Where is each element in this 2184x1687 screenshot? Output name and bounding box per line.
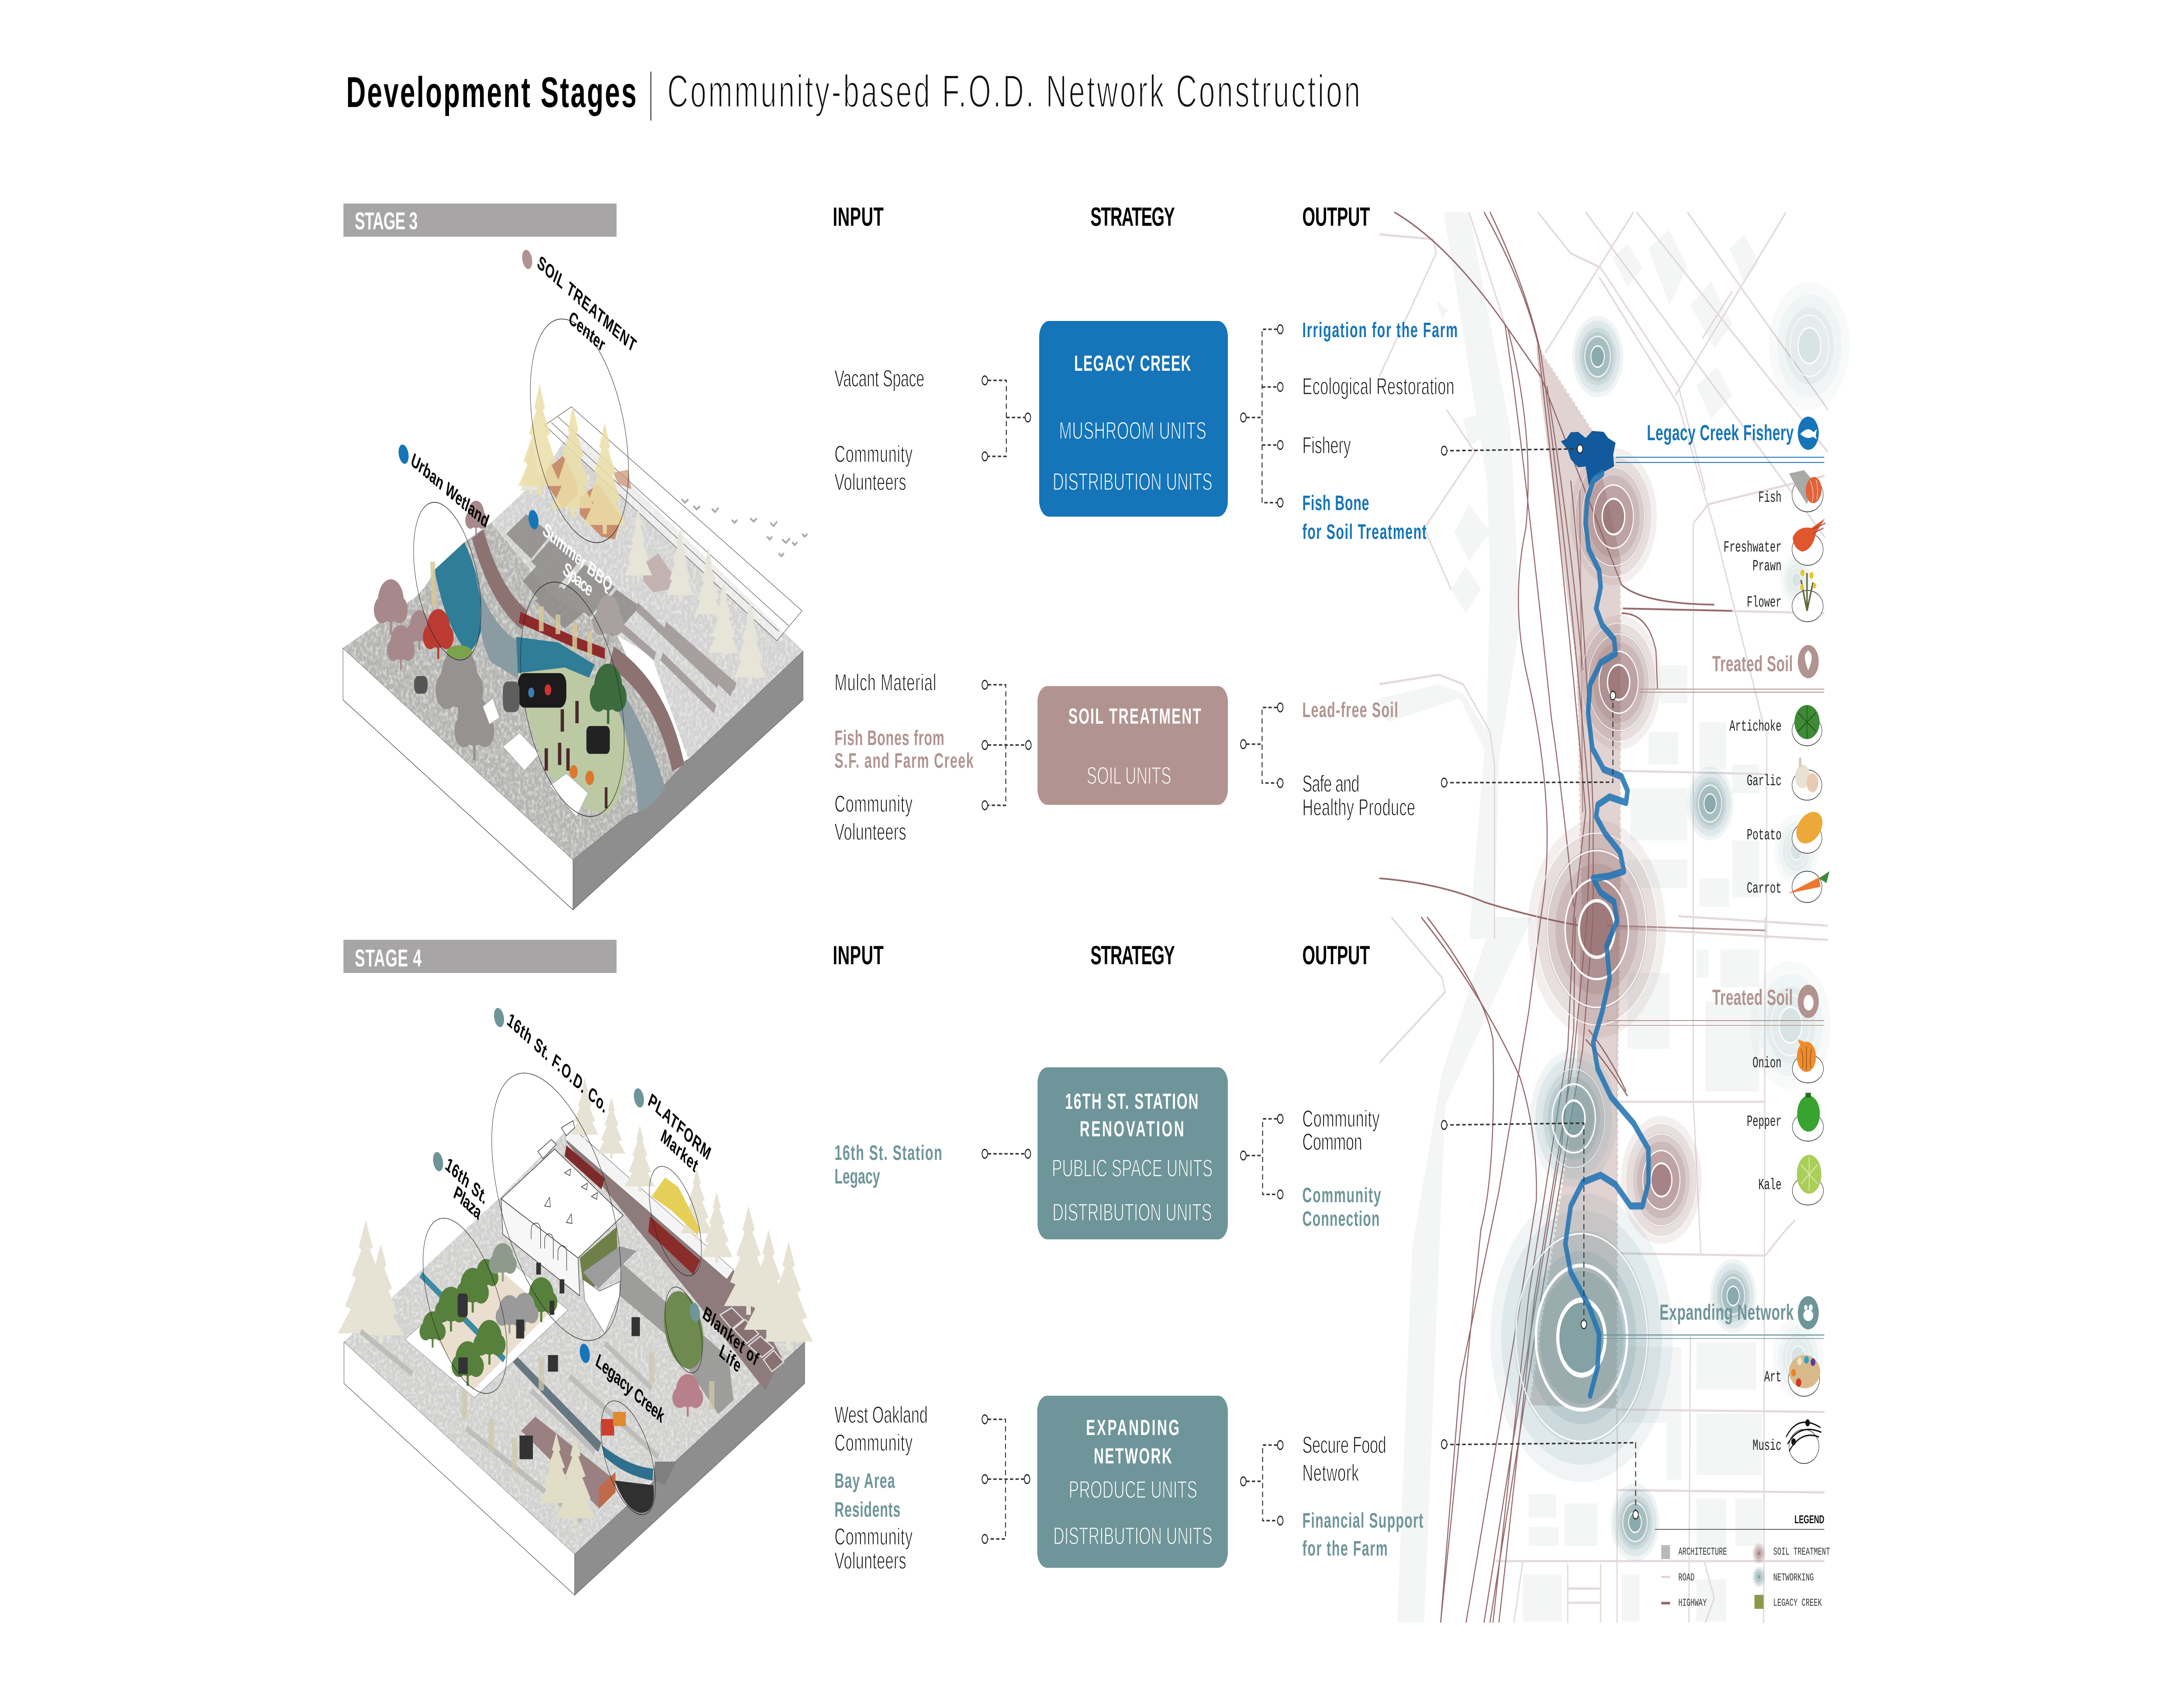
soil beds <box>506 514 640 637</box>
hedge <box>447 645 472 659</box>
stage 3 banner <box>343 204 617 237</box>
output connector <box>1241 1441 1283 1525</box>
input: station legacy: 16th St. Station <box>834 1141 942 1165</box>
soil treatment containers <box>546 456 632 539</box>
icon: pepper <box>1797 1093 1820 1132</box>
outputs: legacy creek <box>1303 318 1458 544</box>
category: treated soil 1: Treated Soil <box>1712 652 1793 676</box>
column headings stage 4: STRATEGY <box>1091 941 1175 970</box>
inputs: legacy creek: Community <box>834 441 912 467</box>
food labels: Kale <box>1759 1176 1782 1194</box>
stage 4 isometric diagram <box>338 1005 813 1595</box>
food labels: Freshwater <box>1724 539 1782 556</box>
green wall <box>580 1227 618 1296</box>
icon: kale <box>1797 1155 1821 1194</box>
input connector <box>982 1149 1030 1158</box>
yellow trees <box>518 383 626 534</box>
strategy box: station renovation: 16TH ST. STATION <box>1065 1089 1198 1114</box>
stage 3 banner: STAGE 3 <box>355 207 418 235</box>
plaza trees <box>419 1243 557 1386</box>
outputs: station renovation: Connection <box>1303 1207 1379 1231</box>
strategy box: legacy creek: MUSHROOM UNITS <box>1059 417 1206 444</box>
category: treated soil 2: Treated Soil <box>1712 985 1793 1010</box>
roof outline <box>545 407 802 641</box>
flow: stage 4 expanding network <box>834 1396 1447 1574</box>
icon: garlic <box>1795 758 1818 792</box>
label: legacy creek: Legacy Creek <box>594 1349 667 1427</box>
flow: stage 3 legacy creek <box>833 202 1458 544</box>
input: station legacy <box>834 1141 942 1188</box>
label: summer bbq space <box>527 507 615 601</box>
inputs: expanding network: Bay Area <box>834 1469 895 1493</box>
walkway <box>478 534 525 620</box>
outputs: station renovation: Community <box>1303 1105 1380 1132</box>
strategy box: expanding network: NETWORK <box>1094 1444 1172 1468</box>
label: 16th st plaza: Plaza <box>451 1182 484 1224</box>
block right face <box>575 1342 805 1595</box>
food labels: Prawn <box>1752 558 1782 575</box>
legend <box>1655 1513 1830 1609</box>
garden <box>620 1263 733 1414</box>
inputs: expanding network <box>834 1401 928 1574</box>
category: expanding network: Expanding Network <box>1659 1300 1794 1325</box>
strategy box: expanding network: DISTRIBUTION UNITS <box>1053 1522 1213 1549</box>
title: Development Stages <box>346 69 636 117</box>
food labels: Carrot <box>1747 880 1782 897</box>
legend: LEGACY CREEK <box>1773 1597 1822 1609</box>
input: station legacy: Legacy <box>834 1165 880 1188</box>
column headings stage 3: STRATEGY <box>1091 202 1175 231</box>
food labels: Fish <box>1759 489 1782 507</box>
inputs: soil treatment: Community <box>834 790 912 817</box>
label: summer bbq space: Space <box>561 558 595 601</box>
inputs: expanding network: Community <box>834 1429 912 1456</box>
inputs: legacy creek: Vacant Space <box>834 365 924 392</box>
stream <box>474 573 521 679</box>
category: legacy creek fishery: Legacy Creek Fishery <box>1647 421 1794 445</box>
legend: SOIL TREATMENT <box>1773 1546 1830 1558</box>
strategy box: station renovation <box>1037 1067 1228 1239</box>
strategy box: soil treatment: SOIL UNITS <box>1087 762 1171 789</box>
plaza <box>405 1254 568 1397</box>
block left face <box>344 1342 575 1595</box>
platform building band <box>567 1128 782 1390</box>
outputs: legacy creek: for Soil Treatment <box>1303 520 1427 544</box>
pizzas <box>570 765 578 778</box>
category: expanding network <box>1603 1296 1824 1339</box>
strategy box: soil treatment: SOIL TREATMENT <box>1068 704 1201 728</box>
outputs: legacy creek: Ecological Restoration <box>1303 373 1455 400</box>
blanket of life planting <box>657 1283 711 1377</box>
birds <box>682 499 807 556</box>
farm rows <box>620 606 735 709</box>
icon: artichoke <box>1794 705 1820 739</box>
water pond <box>516 637 595 680</box>
outputs: soil treatment: Lead-free Soil <box>1303 698 1398 722</box>
strategy box: expanding network: PRODUCE UNITS <box>1069 1476 1197 1503</box>
label: blanket of life: Life <box>717 1340 743 1377</box>
input connector <box>982 680 1031 810</box>
icon: potato <box>1793 806 1826 850</box>
food icons on plates <box>1786 470 1829 1463</box>
trees on left <box>374 501 626 760</box>
conifers <box>338 1078 813 1350</box>
strategy box: station renovation: PUBLIC SPACE UNITS <box>1052 1155 1213 1182</box>
strategy box: expanding network: EXPANDING <box>1086 1415 1179 1440</box>
outputs: soil treatment: Safe and <box>1303 770 1359 797</box>
outputs: expanding network: for the Farm <box>1303 1537 1388 1560</box>
crowd <box>414 673 610 808</box>
label: urban wetland: Urban Wetland <box>409 449 491 532</box>
block left face <box>343 648 573 910</box>
label: summer bbq space: Summer BBQ <box>540 518 615 596</box>
input connector <box>982 376 1030 461</box>
corridor dotted edge <box>1536 343 1621 1409</box>
column headings stage 3 <box>833 202 1370 231</box>
outputs: soil treatment <box>1303 698 1415 821</box>
column headings stage 4: INPUT <box>833 941 884 970</box>
pergola <box>720 1308 784 1372</box>
outputs: expanding network: Financial Support <box>1303 1509 1423 1532</box>
stage 4 banner <box>343 940 617 973</box>
strategy box: soil treatment <box>1037 686 1228 805</box>
strategy box: expanding network <box>1037 1396 1228 1568</box>
food labels: Potato <box>1747 827 1782 844</box>
farm corridor <box>1529 343 1621 1409</box>
label: 16th st f.o.d. co.: 16th St. F.O.D. Co. <box>505 1009 610 1117</box>
title: Community-based F.O.D. Network Construction <box>667 66 1360 117</box>
column headings stage 4 <box>833 941 1370 970</box>
flow: stage 4 station renovation <box>833 941 1447 1239</box>
outputs: soil treatment: Healthy Produce <box>1303 794 1415 821</box>
label: platform market <box>632 1086 713 1176</box>
outputs: expanding network: Network <box>1303 1459 1359 1486</box>
inputs: soil treatment: Volunteers <box>834 818 906 845</box>
strategy box: station renovation: RENOVATION <box>1080 1117 1184 1141</box>
inputs: legacy creek <box>834 365 924 495</box>
legacy creek <box>1561 431 1648 1395</box>
block right face <box>573 651 803 910</box>
inputs: legacy creek: Volunteers <box>834 469 906 495</box>
strategy box: station renovation: DISTRIBUTION UNITS <box>1052 1199 1212 1226</box>
map link dot: community common <box>1441 1121 1447 1129</box>
label: platform market: PLATFORM <box>646 1089 713 1164</box>
input connector <box>982 1415 1030 1543</box>
column headings stage 3: OUTPUT <box>1303 202 1370 231</box>
label: soil treatment center: SOIL TREATMENT <box>535 252 639 356</box>
buildings <box>1436 230 1762 1621</box>
stage 3 isometric diagram <box>343 247 807 910</box>
label: blanket of life: Blanket of <box>701 1302 761 1370</box>
label: 16th st plaza <box>431 1149 490 1224</box>
label: platform market: Market <box>659 1125 701 1176</box>
category: legacy creek fishery <box>1616 417 1824 462</box>
tan grasses <box>432 562 590 656</box>
food labels: Flower <box>1747 594 1782 611</box>
food labels: Pepper <box>1747 1113 1782 1131</box>
food labels: Garlic <box>1747 773 1782 790</box>
yellow tree <box>652 1177 700 1234</box>
pale highway band <box>1379 212 1532 1623</box>
site map <box>1379 212 1850 1623</box>
map link dot: secure food <box>1441 1440 1447 1449</box>
outputs: station renovation: Community <box>1303 1183 1381 1207</box>
stage 4 banner: STAGE 4 <box>355 945 422 972</box>
wetland water <box>434 542 484 654</box>
icon: prawn <box>1793 518 1825 552</box>
highlight ellipses <box>406 1200 525 1412</box>
title <box>346 66 1360 121</box>
strategy box: legacy creek: LEGACY CREEK <box>1074 351 1191 376</box>
cream trees front <box>539 1433 596 1525</box>
icon: palette <box>1789 1355 1820 1388</box>
brown bench volume <box>521 1417 615 1508</box>
inputs: expanding network: Volunteers <box>834 1547 906 1574</box>
annex <box>583 1246 636 1289</box>
people <box>458 1263 640 1459</box>
legend: NETWORKING <box>1773 1572 1814 1584</box>
network and soil rings <box>1490 282 1850 1561</box>
map connector lines <box>1444 449 1636 1515</box>
lawn <box>518 668 628 814</box>
food labels <box>1724 489 1782 1455</box>
icon: flower <box>1800 569 1816 611</box>
inputs: soil treatment: S.F. and Farm Creek <box>834 749 974 773</box>
inputs: expanding network: Community <box>834 1523 912 1550</box>
water cut <box>601 1445 653 1480</box>
flow: stage 3 soil treatment <box>834 669 1447 845</box>
white tables <box>483 698 588 817</box>
food labels: Music <box>1752 1437 1782 1455</box>
label: 16th st plaza: 16th St. <box>443 1153 490 1208</box>
icon: onion <box>1797 1039 1816 1072</box>
inputs: expanding network: Residents <box>834 1498 900 1521</box>
category: treated soil 1 <box>1639 645 1824 692</box>
map link dot: fishery <box>1441 446 1447 455</box>
food labels: Onion <box>1752 1055 1782 1072</box>
station building <box>501 1149 623 1258</box>
ground left <box>343 473 685 860</box>
outputs: legacy creek: Fish Bone <box>1303 491 1369 515</box>
inputs: soil treatment: Fish Bones from <box>834 726 944 750</box>
icon: music <box>1786 1420 1821 1451</box>
outputs: expanding network <box>1303 1432 1423 1560</box>
highlight ellipses <box>400 485 494 677</box>
icon: fish <box>1789 470 1824 507</box>
legend: HIGHWAY <box>1678 1597 1707 1609</box>
strategy box: legacy creek <box>1039 321 1228 517</box>
long planters <box>361 1332 658 1521</box>
market crates <box>601 1419 614 1435</box>
map link dot: produce <box>1441 778 1447 787</box>
light trees <box>521 439 766 684</box>
outputs: legacy creek: Irrigation for the Farm <box>1303 318 1458 342</box>
red walkway <box>519 612 605 659</box>
output connector <box>1241 1114 1283 1199</box>
inputs: expanding network: West Oakland <box>834 1401 928 1428</box>
ground right <box>491 428 803 759</box>
map connector end dots <box>1577 445 1638 1519</box>
output connector <box>1241 703 1283 787</box>
icon: carrot <box>1788 871 1829 894</box>
grey building <box>643 553 673 592</box>
column headings stage 3: INPUT <box>833 202 884 231</box>
outputs: station renovation: Common <box>1303 1128 1362 1155</box>
label: soil treatment center: Center <box>567 307 608 356</box>
food labels: Art <box>1764 1369 1782 1386</box>
outputs: station renovation <box>1303 1105 1381 1231</box>
strategy box: legacy creek: DISTRIBUTION UNITS <box>1053 468 1213 495</box>
inputs: soil treatment <box>834 669 974 845</box>
highways <box>1379 212 1765 1623</box>
ground <box>344 1125 805 1554</box>
outputs: expanding network: Secure Food <box>1303 1432 1386 1458</box>
legend: ROAD <box>1678 1572 1694 1584</box>
food labels: Artichoke <box>1729 718 1782 735</box>
inputs: soil treatment: Mulch Material <box>834 669 936 696</box>
column headings stage 4: OUTPUT <box>1303 941 1370 970</box>
output connector <box>1241 325 1283 507</box>
grasses <box>464 1352 712 1471</box>
legend: ARCHITECTURE <box>1678 1546 1727 1558</box>
category: treated soil 2 <box>1607 985 1824 1025</box>
creek runnel <box>421 1275 505 1360</box>
roads <box>1379 212 1828 1623</box>
legend: LEGEND <box>1794 1513 1824 1526</box>
outputs: legacy creek: Fishery <box>1303 432 1351 459</box>
